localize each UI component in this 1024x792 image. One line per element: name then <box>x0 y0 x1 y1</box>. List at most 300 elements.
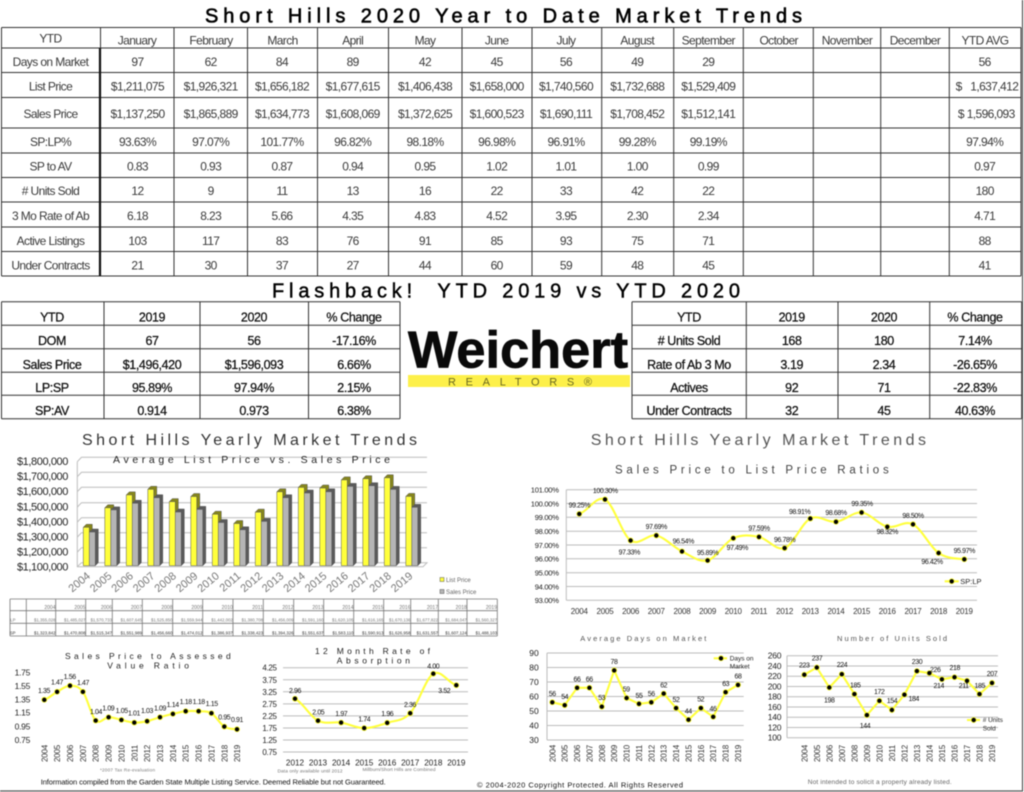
table header row: April <box>342 33 363 47</box>
panel: flashback table left: 2019 <box>139 311 166 325</box>
panel: flashback table right: Under Contracts <box>646 404 732 418</box>
data table: list and sales price by year: 2010 <box>222 605 233 611</box>
row: SP to AV: SP to AV <box>29 160 72 174</box>
row: days on market: 45 <box>491 55 504 69</box>
row: units sold: 11 <box>276 184 289 198</box>
data labels: 0.95 <box>218 714 231 722</box>
legend <box>714 656 754 670</box>
y axis labels: 98.00% <box>535 527 559 536</box>
y axis labels: 96.00% <box>535 555 559 564</box>
data labels: 68 <box>734 674 742 680</box>
data labels: 184 <box>908 696 919 703</box>
logo: Weichert Realtors: Weichert <box>408 322 628 380</box>
x axis labels: 2012 <box>647 744 656 762</box>
row: under contracts: 30 <box>205 258 218 272</box>
panel: flashback table right: -26.65% <box>953 358 997 372</box>
y axis labels: 99.00% <box>535 513 559 522</box>
y axis labels: 1.75 <box>15 668 31 678</box>
x axis labels: 2004 <box>571 607 589 616</box>
row: rate of absorption: 4.71 <box>974 209 996 223</box>
x axis labels: 2007 <box>585 744 594 762</box>
legend <box>440 578 477 596</box>
data table: list and sales price by year: $1,670,136 <box>389 618 411 622</box>
table header row: September <box>682 33 736 47</box>
data labels: 98.91% <box>789 509 811 516</box>
y axis labels: 95.00% <box>535 568 559 578</box>
legend <box>945 577 982 586</box>
panel: flashback table left: SP:AV <box>35 404 70 418</box>
x axis labels: 2019 <box>389 570 415 595</box>
data labels: 230 <box>912 659 923 666</box>
legend: # Units <box>983 717 1004 724</box>
panel: flashback table left: 6.38% <box>337 404 371 418</box>
trend line <box>579 499 964 561</box>
row: list price: $ <box>956 80 963 94</box>
x axis labels <box>286 758 466 767</box>
x axis labels: 2012 <box>238 570 265 595</box>
x axis labels <box>66 570 415 595</box>
data labels: 46 <box>710 706 717 713</box>
x axis labels: 2004 <box>800 744 809 762</box>
row: under contracts: 59 <box>560 258 573 272</box>
y axis labels: 1.25 <box>262 736 278 745</box>
panel: flashback table right: 2.34 <box>873 358 896 372</box>
data labels: 226 <box>930 667 941 674</box>
chart title <box>315 646 431 665</box>
row: list price: $1,658,000 <box>470 80 525 94</box>
data labels: 55 <box>636 693 643 700</box>
data labels: 59 <box>623 686 630 694</box>
data table: list and sales price by year: $1,559,944 <box>181 618 203 622</box>
row: under contracts: Under Contracts <box>11 258 90 272</box>
row: list price: $1,732,688 <box>610 80 665 94</box>
data labels: 1.05 <box>116 708 128 715</box>
x axis labels: 2008 <box>92 744 101 762</box>
row: list price: $1,926,321 <box>184 80 239 94</box>
data labels: 1.35 <box>38 688 51 695</box>
table header row: YTD <box>39 31 63 45</box>
panel: flashback table right: -22.83% <box>953 381 997 395</box>
x axis labels: 2014 <box>828 607 845 616</box>
data table: list and sales price by year: 2007 <box>131 605 142 611</box>
x axis labels: 2015 <box>303 570 329 595</box>
row: active listings: 83 <box>276 234 289 248</box>
data labels: 99.35% <box>851 501 873 508</box>
footnotes: Millburn/Short Hills are Combined <box>362 767 436 773</box>
x axis labels: 2010 <box>195 570 222 595</box>
panel: flashback table right: 180 <box>874 334 894 348</box>
data labels: 211 <box>959 683 969 690</box>
data labels: 96.78% <box>774 537 796 544</box>
row: sales price: $1,708,452 <box>610 107 665 121</box>
panel: flashback table left: YTD <box>40 311 64 325</box>
row: active listings: 103 <box>128 234 148 248</box>
heading: yearly market trends left: Short Hills Yearly Market Trends <box>82 432 417 449</box>
y axis labels <box>529 648 539 745</box>
x axis labels: 2008 <box>152 570 179 595</box>
data table: list and sales price by year: $1,525,850 <box>151 618 173 622</box>
data labels: 97.69% <box>646 524 667 531</box>
row: units sold: # Units Sold <box>22 184 79 198</box>
data points <box>577 497 967 563</box>
table header row: March <box>267 33 298 47</box>
panel: flashback table left: 2.15% <box>337 381 371 395</box>
data points <box>292 671 459 731</box>
data table: list and sales price by year: 2011 <box>252 605 263 611</box>
y axis labels: 2.75 <box>262 700 278 709</box>
row: SP:LP%: 96.82% <box>334 135 372 149</box>
data table: list and sales price by year: $1,355,028 <box>34 618 56 622</box>
data table: list and sales price by year: $1,456,009 <box>272 618 294 622</box>
row: sales price: Sales Price <box>23 107 78 121</box>
row: SP to AV: 0.93 <box>200 160 222 174</box>
x axis labels: 2013 <box>913 744 922 762</box>
y axis labels: 2.25 <box>262 712 278 721</box>
row: sales price: $1,372,625 <box>398 107 453 121</box>
table header row: YTD AVG <box>962 33 1009 47</box>
x axis labels: 2006 <box>66 744 75 762</box>
x axis labels: 2015 <box>938 744 947 762</box>
x axis labels: 2005 <box>813 744 822 762</box>
row: SP to AV: 0.87 <box>272 160 293 174</box>
data labels <box>289 664 451 724</box>
data labels: 66 <box>586 676 593 684</box>
data table: list and sales price by year: 2014 <box>342 605 354 611</box>
y axis labels: 40 <box>529 720 539 730</box>
x axis labels: 2009 <box>610 744 619 762</box>
x axis labels: 2012 <box>900 744 909 762</box>
y axis labels: $1,600,000 <box>17 486 68 498</box>
row: SP:LP%: 98.18% <box>406 135 444 149</box>
chart title: Sales Price to List Price Ratios <box>615 465 889 477</box>
data labels: 4.00 <box>427 664 440 670</box>
data labels <box>569 488 975 566</box>
data table: list and sales price by year: $1,488,103 <box>475 630 498 635</box>
x axis labels: 2017 <box>904 607 922 616</box>
data table: list and sales price by year: $1,551,989 <box>120 630 143 635</box>
x axis labels: 2009 <box>105 744 114 762</box>
row: units sold: 33 <box>560 184 573 198</box>
x axis labels: 2016 <box>697 744 706 762</box>
x axis labels: 2004 <box>66 570 93 595</box>
row: days on market: 97 <box>131 55 144 69</box>
data table: list and sales price by year: $1,591,160 <box>302 618 324 622</box>
y axis labels: $1,300,000 <box>17 532 68 544</box>
data labels: 62 <box>660 682 668 690</box>
y axis labels <box>262 664 278 757</box>
y axis labels: $1,200,000 <box>17 546 68 558</box>
data table: list and sales price by year: $1,607,124 <box>445 630 467 635</box>
y axis labels: 200 <box>768 682 782 692</box>
data labels: 214 <box>933 683 944 690</box>
panel: flashback table left: -17.16% <box>332 334 376 348</box>
data points <box>802 665 995 718</box>
x axis labels: 2014 <box>169 744 178 762</box>
data labels: 1.96 <box>381 711 394 718</box>
row: under contracts: 37 <box>276 258 289 272</box>
chart: average days on market <box>529 634 754 762</box>
row: SP to AV: 1.00 <box>627 160 649 174</box>
data labels: 1.09 <box>102 706 115 712</box>
panel: flashback table left: 97.94% <box>234 381 274 395</box>
row: rate of absorption: 2.30 <box>627 209 649 223</box>
y axis labels <box>15 668 31 745</box>
x axis labels: 2019 <box>988 744 997 762</box>
row: list price: $1,529,409 <box>681 80 736 94</box>
disclaimer: copyright: © 2004-2020 Copyright Protected. All Rights Reserved <box>477 780 683 789</box>
data table: list and sales price by year: $1,626,958 <box>389 630 411 635</box>
data labels: 198 <box>824 698 835 704</box>
row: list price: $1,677,615 <box>326 80 381 94</box>
y axis labels: 1.15 <box>15 708 31 718</box>
panel: flashback table left <box>2 302 400 419</box>
x axis labels <box>40 744 242 762</box>
row: sales price: $ 1,596,093 <box>958 107 1016 121</box>
trend line <box>804 668 992 715</box>
x axis labels: 2017 <box>963 744 972 762</box>
y axis labels: 30 <box>529 735 539 745</box>
panel: flashback table left: % Change <box>326 311 382 325</box>
x axis labels: 2010 <box>875 744 884 762</box>
x axis labels: 2013 <box>802 607 820 616</box>
legend: SP:LP <box>960 577 982 586</box>
x axis labels: 2009 <box>174 570 200 595</box>
y axis labels: 1.75 <box>262 724 278 733</box>
data table: list and sales price by year: 2004 <box>44 605 56 611</box>
y axis labels: 100 <box>768 733 782 743</box>
panel: flashback table right: 3.19 <box>780 358 804 372</box>
data labels: 97.33% <box>619 550 640 556</box>
y axis labels: 160 <box>768 702 782 712</box>
row: active listings: 76 <box>347 234 360 248</box>
x axis labels: 2012 <box>143 744 152 762</box>
panel: flashback table left: LP:SP <box>35 381 69 395</box>
legend: Sales Price <box>446 590 477 596</box>
row: rate of absorption: 4.83 <box>415 209 436 223</box>
chart title: Absorption <box>337 655 410 665</box>
y axis labels: 1.55 <box>15 681 31 691</box>
panel: flashback table right: 92 <box>785 381 799 395</box>
row: under contracts: 41 <box>979 258 992 272</box>
x axis labels: 2014 <box>281 570 308 595</box>
y axis labels <box>768 651 782 743</box>
data labels: 185 <box>850 682 861 690</box>
panel: flashback table left: 95.89% <box>132 381 172 395</box>
row: rate of absorption: 5.66 <box>272 209 293 223</box>
x axis labels: 2015 <box>853 607 871 616</box>
row: under contracts: 27 <box>347 258 360 272</box>
data table: list and sales price by year: $1,583,110 <box>332 630 354 635</box>
panel: flashback table right: 45 <box>877 404 891 418</box>
x axis labels: 2008 <box>674 607 691 616</box>
x axis labels: 2019 <box>956 607 974 616</box>
table header row: May <box>415 33 436 47</box>
y axis labels: 3.75 <box>262 676 278 685</box>
y axis labels: $1,800,000 <box>17 456 68 468</box>
data labels: 1.74 <box>358 716 371 724</box>
panel: flashback table right: Rate of Ab 3 Mo <box>647 358 731 372</box>
row: sales price: $1,137,250 <box>110 107 165 121</box>
data table: list and sales price by year: SP <box>10 630 16 635</box>
row: rate of absorption: 4.35 <box>342 209 364 223</box>
data labels: 218 <box>949 665 960 672</box>
x axis labels: 2013 <box>660 744 669 762</box>
data labels: 1.15 <box>206 701 218 708</box>
x axis labels: 2005 <box>88 570 114 595</box>
bars: sales price <box>89 483 421 566</box>
legend: Days on <box>730 656 754 662</box>
panel: flashback table right: 168 <box>782 334 802 348</box>
chart: sales price to list price ratios <box>531 465 982 616</box>
y axis labels: $1,500,000 <box>17 502 68 514</box>
trend line <box>44 686 237 729</box>
panel: flashback table right: Actives <box>670 381 708 395</box>
row: active listings: 93 <box>560 234 573 248</box>
row: units sold: 16 <box>419 184 432 198</box>
x axis labels <box>800 744 997 762</box>
row: units sold: 13 <box>347 184 360 198</box>
row: SP to AV: 0.94 <box>342 160 364 174</box>
data labels: 1.47 <box>51 680 64 686</box>
x axis labels: 2011 <box>751 607 768 616</box>
data points <box>550 668 741 722</box>
row: under contracts: 45 <box>702 258 715 272</box>
data labels: 1.18 <box>180 699 192 706</box>
row: days on market: 89 <box>347 55 360 69</box>
x axis labels: 2014 <box>672 744 681 762</box>
row: days on market: Days on Market <box>13 55 90 69</box>
row: rate of absorption: 3.95 <box>556 209 577 223</box>
data labels: 154 <box>887 698 898 705</box>
data labels <box>38 674 244 724</box>
legend: Market <box>730 664 750 670</box>
x axis labels: 2005 <box>596 607 614 616</box>
data table: list and sales price by year: $1,590,913 <box>362 630 384 635</box>
table header row: November <box>822 33 873 47</box>
data labels: 95.89% <box>697 550 719 557</box>
data labels: 1.14 <box>167 702 179 709</box>
data labels: 2.96 <box>289 688 302 695</box>
data table: list and sales price by year: $1,620,105 <box>332 618 354 622</box>
y axis labels: 240 <box>768 661 782 671</box>
chart: sales price to assessed value ratio <box>15 651 244 772</box>
data table: list and sales price by year: $1,323,842 <box>34 630 56 635</box>
x axis labels: 2005 <box>53 744 62 762</box>
chart title: Sales Price to Assessed <box>65 651 231 661</box>
data table: list and sales price by year: 2019 <box>486 605 497 611</box>
x axis labels: 2004 <box>40 744 49 762</box>
data labels: 2.36 <box>404 702 417 709</box>
bars: list price <box>83 475 415 566</box>
x axis labels: 2016 <box>879 607 897 616</box>
data labels: 3.52 <box>438 688 451 695</box>
data labels: 52 <box>672 697 680 704</box>
x axis labels: 2006 <box>622 607 640 616</box>
x axis labels: 2018 <box>220 744 229 762</box>
row: SP:LP%: 93.63% <box>119 135 157 149</box>
data labels: 1.56 <box>64 674 76 681</box>
data labels: 100.30% <box>593 488 618 495</box>
row: units sold: 22 <box>491 184 504 198</box>
row: SP:LP%: 96.91% <box>547 135 585 149</box>
data table: list and sales price by year: $1,456,660 <box>151 630 173 635</box>
y axis labels: 93.00% <box>535 596 559 605</box>
data labels: 1.04 <box>90 709 103 716</box>
x axis labels: 2016 <box>378 758 397 767</box>
title: Short Hills 2020 Year to Date Market Trends <box>205 6 802 28</box>
panel: flashback table right: % Change <box>947 311 1003 325</box>
y axis labels: 4.25 <box>262 664 278 673</box>
row: days on market: 84 <box>276 55 289 69</box>
row: sales price: $1,865,889 <box>184 107 239 121</box>
panel: flashback table left: $1,496,420 <box>123 358 182 372</box>
y axis labels: 1.35 <box>15 694 31 704</box>
row: active listings: 117 <box>202 234 220 248</box>
x axis labels: 2007 <box>838 744 847 762</box>
x axis labels: 2011 <box>635 744 644 761</box>
data labels: 98.68% <box>825 510 847 517</box>
y axis labels: 80 <box>529 662 539 672</box>
data table: list and sales price by year: $1,570,733 <box>90 618 113 622</box>
row: rate of absorption: 4.52 <box>486 209 508 223</box>
data table: list and sales price by year: $1,386,937 <box>211 630 233 635</box>
data labels <box>799 656 998 730</box>
row: SP to AV: 1.01 <box>556 160 577 174</box>
row: days on market: 62 <box>205 55 218 69</box>
data table: list and sales price by year: 2017 <box>427 605 438 611</box>
x axis labels: 2009 <box>863 744 872 762</box>
data table: list and sales price by year: $1,677,822 <box>416 618 439 622</box>
y axis labels: 0.75 <box>15 735 31 745</box>
row: SP to AV: 1.02 <box>486 160 508 174</box>
row: sales price: $1,600,523 <box>470 107 525 121</box>
row: SP:LP%: SP:LP% <box>30 135 72 149</box>
data labels: 66 <box>574 676 581 684</box>
row: active listings: 71 <box>702 234 715 248</box>
row: SP:LP%: 101.77% <box>260 135 305 149</box>
row: units sold: 42 <box>631 184 644 198</box>
data table: list and sales price by year: $1,631,557 <box>416 630 439 635</box>
chart: average list price vs sales price <box>17 454 477 596</box>
data table: list and sales price by year: $1,338,423 <box>241 630 264 635</box>
chart: number of units sold <box>768 634 1004 762</box>
data table: list and sales price by year: 2012 <box>282 605 294 611</box>
data labels: 98.32% <box>877 529 898 536</box>
y axis labels: $1,700,000 <box>17 471 68 483</box>
x axis labels <box>548 744 743 762</box>
data labels: 56 <box>648 691 655 698</box>
x axis labels: 2011 <box>130 744 139 761</box>
row: SP:LP%: 99.28% <box>619 135 657 149</box>
x axis labels: 2019 <box>447 758 466 767</box>
x axis labels: 2007 <box>648 607 666 616</box>
panel: flashback table right: 32 <box>785 404 799 418</box>
data labels: 1.18 <box>193 699 205 706</box>
row: rate of absorption: 8.23 <box>200 209 222 223</box>
x axis labels <box>571 607 974 616</box>
table header row: January <box>118 33 157 47</box>
row: rate of absorption: 6.18 <box>127 209 149 223</box>
data table: list and sales price by year: $1,684,047 <box>445 618 467 622</box>
row: sales price: $1,608,069 <box>326 107 381 121</box>
x axis labels: 2007 <box>79 744 88 762</box>
y axis labels: 260 <box>768 651 782 661</box>
row: list price: List Price <box>29 80 73 94</box>
y axis labels: 90 <box>529 648 539 658</box>
row: units sold: 22 <box>702 184 715 198</box>
row: list price: $1,406,438 <box>398 80 453 94</box>
data labels: 2.05 <box>312 710 325 716</box>
